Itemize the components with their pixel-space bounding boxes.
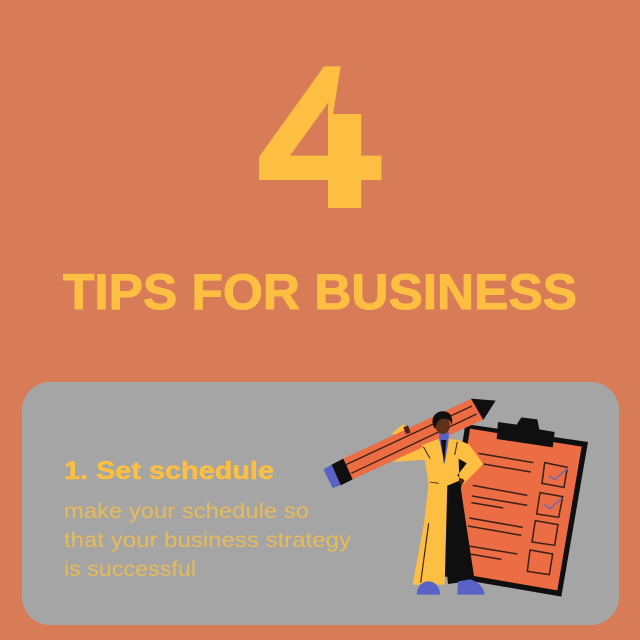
panel: tip 1 <box>22 382 619 625</box>
illustration: businessperson with pencil and clipboard <box>323 399 588 597</box>
shoes <box>417 579 485 595</box>
jacket <box>422 439 483 486</box>
tip description: that your business strategy <box>64 529 352 552</box>
pencil <box>323 399 496 488</box>
tip description: is successful <box>64 558 196 581</box>
big number 4: 4 <box>258 25 380 249</box>
hand on pencil <box>403 425 411 434</box>
clipboard <box>442 417 588 597</box>
neck and tie <box>439 432 449 464</box>
title: TIPS FOR BUSINESS <box>63 264 577 320</box>
tip heading: 1. Set schedule <box>64 457 274 485</box>
head <box>432 411 452 434</box>
tip description: make your schedule so <box>64 500 309 523</box>
tip description <box>64 500 352 581</box>
trousers <box>413 482 475 585</box>
raised arm <box>392 424 432 462</box>
